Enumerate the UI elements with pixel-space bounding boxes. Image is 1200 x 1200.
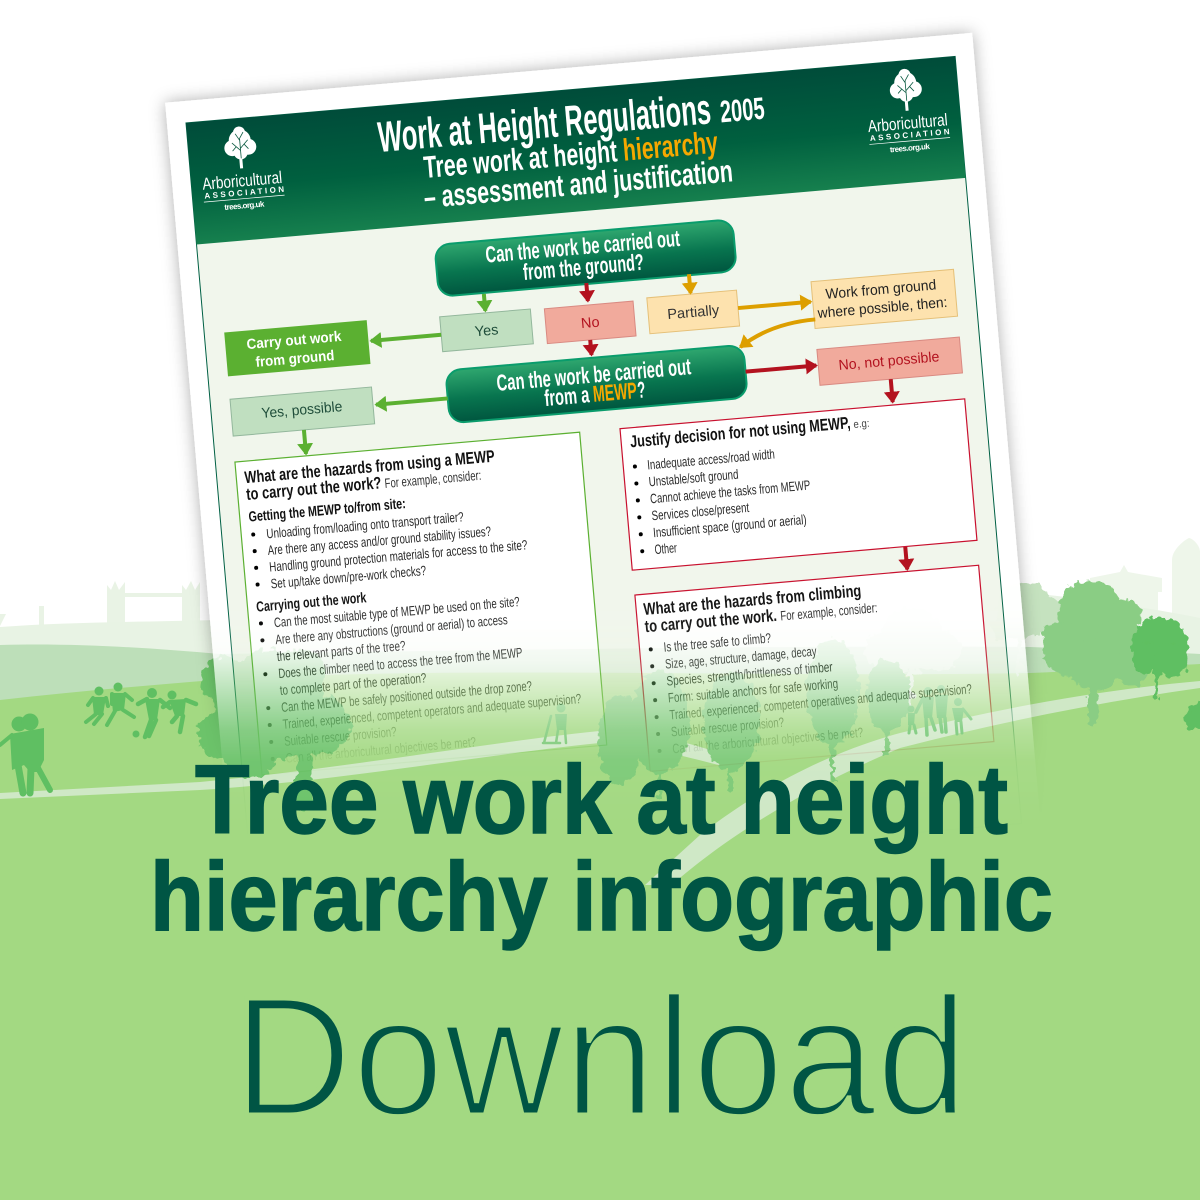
- box: Yes: Yes: [474, 322, 499, 340]
- poster title: 2005: [719, 91, 766, 129]
- list: carrying out the work: Can the most suitable type of MEWP be used on the site?: [273, 594, 520, 630]
- question box 1: Can the work be carried out: [484, 225, 681, 268]
- box: no, not possible: [817, 337, 962, 385]
- question box 2: [445, 345, 748, 423]
- main heading: hierarchy infographic: [150, 842, 1053, 951]
- heading: What are the hazards from using a MEWP: [244, 447, 495, 487]
- box: carry out work from ground: [224, 320, 370, 376]
- download label: Download: [233, 962, 968, 1152]
- panel: climbing hazards: Form: suitable anchors for safe working: [667, 676, 839, 706]
- panel: climbing hazards: [635, 565, 994, 771]
- list: carrying out the work: Can all the arboricultural objectives be met?: [285, 734, 477, 766]
- list: getting the MEWP to site: [249, 498, 527, 590]
- skyline: domed building and pavilion: [1090, 538, 1200, 625]
- panel: climbing hazards: What are the hazards from climbing: [643, 581, 862, 619]
- box: work from ground where possible: [811, 269, 958, 328]
- arrow: to Partially: [689, 274, 691, 293]
- people: couple walking: [0, 714, 50, 793]
- people: family running: [908, 685, 971, 735]
- poster title: [376, 96, 764, 206]
- arrow: to Yes: [484, 294, 485, 311]
- skyline: Tower Bridge: [0, 581, 200, 630]
- box: work from ground where possible: where possible, then:: [816, 295, 948, 322]
- question box 2: MEWP: [592, 377, 638, 407]
- arrow: justify to climbing: [905, 547, 907, 569]
- list: carrying out the work: Are there any obstructions (ground or aerial) to access: [275, 612, 508, 647]
- arrow: Yes, possible to hazards: [304, 430, 306, 454]
- poster title: Tree work at height: [422, 133, 619, 185]
- arrow: Yes to Carry out: [371, 335, 441, 341]
- panel: climbing hazards: Size, age, structure, damage, decay: [664, 644, 817, 672]
- icon: tree: [224, 126, 256, 168]
- panel: justify decision: Services close/present: [651, 500, 750, 523]
- poster title: – assessment and justification: [422, 153, 734, 215]
- flow arrows: [297, 274, 914, 571]
- box: carry out work from ground: Carry out work: [246, 329, 343, 353]
- poster body: [185, 56, 1018, 782]
- box: carry out work from ground: from ground: [255, 348, 335, 371]
- arrow: Partially to Work from ground: [738, 302, 811, 308]
- box: work from ground where possible: Work from ground: [825, 277, 937, 303]
- list: carrying out the work: to complete part of the operation?: [279, 670, 427, 698]
- footpaths: [0, 681, 1200, 885]
- panel: justify decision: Inadequate access/road width: [647, 446, 775, 472]
- poster title: hierarchy: [621, 125, 720, 168]
- panel: climbing hazards: Is the tree safe to climb?: [663, 630, 772, 655]
- hills: [0, 592, 1200, 1200]
- list: carrying out the work: Does the climber need to access the tree from the MEWP: [278, 645, 523, 681]
- logo left: [202, 126, 285, 210]
- list: carrying out the work: Can the MEWP be safely positioned outside the drop zone?: [281, 678, 533, 715]
- list: carrying out the work: Carrying out the work: [256, 590, 368, 616]
- box: no, not possible: No, not possible: [838, 349, 940, 374]
- logo right: Arboricultural: [867, 110, 948, 136]
- icon: tree: [890, 68, 922, 111]
- list: getting the MEWP to site: Handling ground protection materials for access to the site?: [269, 537, 528, 575]
- logo left: ASSOCIATION: [204, 185, 285, 201]
- logo left: Arboricultural: [202, 168, 283, 194]
- arrow: No to box 2: [590, 340, 592, 355]
- people: scooter rider: [543, 704, 567, 743]
- list: carrying out the work: Suitable rescue provision?: [284, 724, 397, 749]
- box: No: [544, 301, 636, 344]
- poster title: Work at Height Regulations: [376, 85, 713, 162]
- poster sheet with fade: [156, 24, 1036, 770]
- logo right: [868, 68, 950, 152]
- arrow: Work from ground to box 2: [739, 319, 817, 347]
- arrow: to No: [586, 283, 588, 301]
- box: No: No: [580, 315, 600, 332]
- box: yes, possible: Yes, possible: [261, 399, 343, 422]
- white paper sheet: [156, 24, 1036, 758]
- panel: justify decision: Other: [654, 540, 678, 557]
- question box 2: from a: [543, 381, 590, 411]
- list: getting the MEWP to site: Are there any access and/or ground stability issues?: [267, 524, 492, 558]
- question box 2: ?: [636, 376, 646, 403]
- main heading: [150, 745, 1053, 951]
- heading: For example, consider:: [384, 468, 482, 491]
- panel: MEWP hazards: [235, 432, 607, 775]
- main heading: Tree work at height: [195, 745, 1008, 854]
- header band: [186, 56, 966, 245]
- box: yes, possible: [230, 387, 375, 436]
- trees behind the poster: [198, 580, 1200, 810]
- panel: justify decision: Cannot achieve the tasks from MEWP: [650, 478, 811, 506]
- box: Yes: [440, 309, 533, 352]
- box: Partially: [647, 290, 740, 334]
- question box 2: Can the work be carried out: [495, 353, 692, 396]
- list: getting the MEWP to site: Set up/take down/pre-work checks?: [270, 563, 427, 591]
- panel: justify decision: e.g:: [853, 418, 870, 431]
- logo right: trees.org.uk: [890, 142, 931, 154]
- arrow: box 2 to Yes, possible: [376, 398, 448, 405]
- question box 1: [434, 219, 737, 297]
- logo left: trees.org.uk: [224, 200, 265, 212]
- background landscape: [0, 538, 1200, 1200]
- arrow: box 2 to No, not possible: [746, 366, 816, 372]
- panel: climbing hazards: Trained, experienced, competent operatives and adequate supervision?: [669, 681, 972, 722]
- panel: climbing hazards: For example, consider:: [780, 600, 878, 624]
- panel: climbing hazards: Can all the arboricultural objectives be met?: [672, 725, 864, 756]
- panel: climbing hazards: Suitable rescue provision?: [670, 715, 785, 739]
- panel: justify decision: Unstable/soft ground: [648, 467, 739, 489]
- list: carrying out the work: Trained, experienced, competent operators and adequate supervision?: [282, 691, 582, 732]
- panel: justify decision: Insufficient space (ground or aerial): [652, 512, 807, 540]
- list: carrying out the work: the relevant parts of the tree?: [276, 638, 406, 664]
- arrow: No, not possible to justify: [891, 379, 893, 402]
- list: getting the MEWP to site: Unloading from/loading onto transport trailer?: [266, 509, 464, 541]
- panel: climbing hazards: Species, strength/brittleness of timber: [666, 659, 834, 689]
- heading: to carry out the work?: [245, 473, 382, 504]
- list: getting the MEWP to site: Getting the MEWP to/from site:: [248, 496, 406, 526]
- panel: justify decision: [620, 399, 977, 570]
- box: Partially: Partially: [667, 303, 721, 323]
- list: carrying out the work: [256, 592, 581, 762]
- logo right: ASSOCIATION: [870, 127, 950, 143]
- people: four football players: [86, 682, 196, 738]
- heading: [244, 450, 494, 500]
- panel: justify decision: Justify decision for not using MEWP,: [629, 413, 851, 451]
- panel: climbing hazards: to carry out the work.: [644, 606, 778, 636]
- question box 1: from the ground?: [522, 249, 645, 285]
